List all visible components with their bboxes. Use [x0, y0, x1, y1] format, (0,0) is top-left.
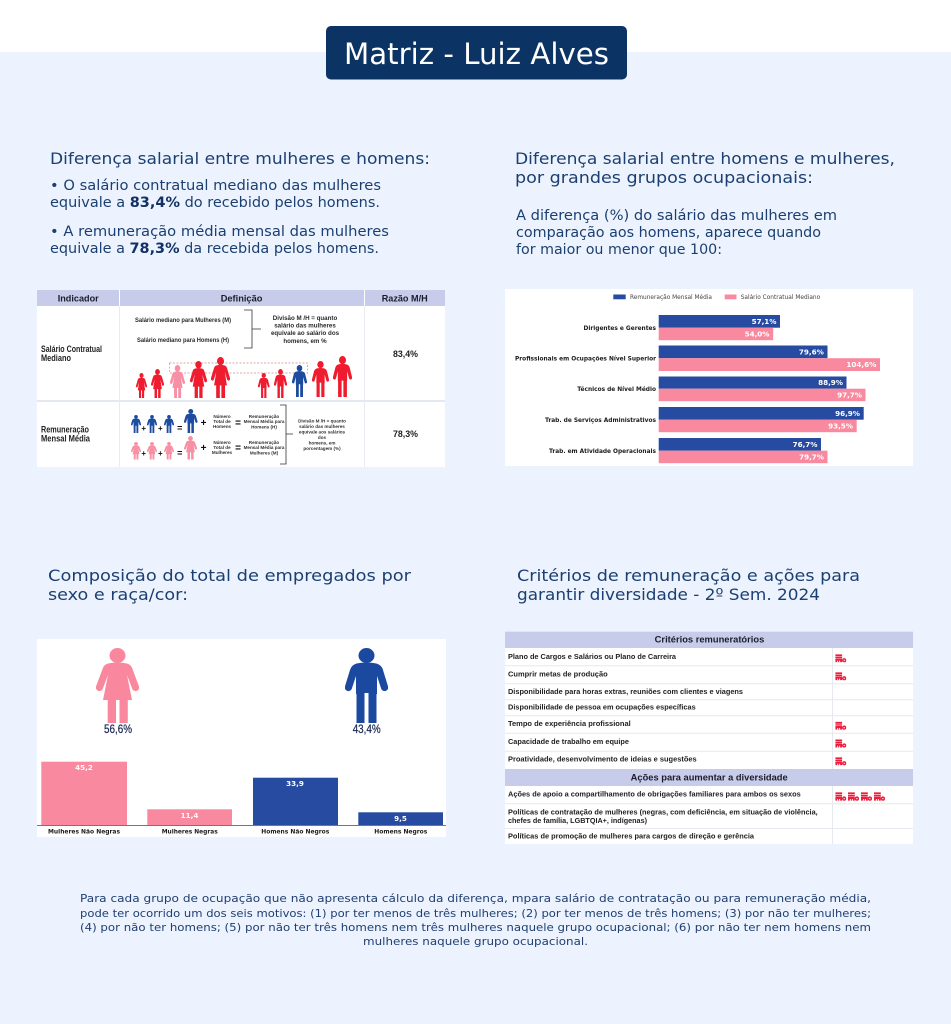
table header — [37, 290, 445, 306]
icons: fórmula homens — [131, 409, 285, 433]
row: trabalho em equipe — [508, 737, 846, 748]
icon: mulher 56,6% — [96, 648, 139, 736]
footer note — [80, 892, 871, 948]
row: atividade operacionais: 76,7% — [793, 440, 818, 449]
icons: fórmula mulheres: Mulheres — [212, 450, 233, 455]
legend — [613, 294, 821, 301]
section header: critérios remuneratórios — [505, 632, 913, 648]
row label: salário contratual mediano — [41, 344, 102, 363]
value 78,3%: 78,3% — [393, 429, 418, 439]
icons: fórmula mulheres: + — [158, 449, 163, 458]
icons: pessoas salário mediano — [136, 356, 352, 398]
definition text: divisão remuneração: dos — [318, 435, 327, 440]
icon: mulher 56,6%: 56,6% — [104, 722, 132, 736]
definition text: divisão remuneração — [280, 405, 346, 464]
heading: grandes grupos ocupacionais: Diferença salarial entre homens e mulheres, — [515, 149, 895, 168]
icons: fórmula homens: + — [141, 424, 146, 433]
section header: critérios remuneratórios: Critérios remuneratórios — [655, 635, 764, 645]
row: políticas de contratação: Políticas de contratação de mulheres (negras, com deficiência, em situação de violência, — [508, 807, 818, 816]
icons: fórmula homens: Remuneração — [249, 414, 279, 419]
row: apoio a obrigações familiares — [508, 790, 884, 801]
icons: fórmula mulheres: Remuneração — [249, 440, 279, 445]
icons: fórmula homens: Número — [213, 414, 231, 419]
section header: ações para diversidade: Ações para aumentar a diversidade — [631, 773, 788, 783]
row: tempo de experiência: Tempo de experiência profissional — [508, 719, 631, 728]
row: políticas de contratação — [508, 807, 818, 825]
definition text: divisão remuneração: Divisão M /H = quanto — [298, 418, 346, 424]
icons: fórmula homens: Mensal Média para — [244, 419, 285, 424]
heading: grandes grupos ocupacionais: por grandes grupos ocupacionais: — [515, 168, 813, 187]
bar: mulheres não negras: Mulheres Não Negras — [48, 828, 120, 836]
row: atividade operacionais — [549, 438, 828, 463]
row: horas extras: Disponibilidade para horas extras, reuniões com clientes e viagens — [508, 687, 743, 696]
definition text: salário mediano: Salário mediano para Homens (H) — [137, 337, 229, 344]
heading: critérios: garantir diversidade - 2º Sem. 2024 — [517, 585, 820, 604]
row: proatividade — [508, 755, 846, 765]
definition text: salário mediano: Divisão M /H = quanto — [273, 315, 337, 322]
row: profissionais nível superior — [515, 346, 880, 371]
row: técnicos de nível médio: 88,9% — [818, 378, 843, 387]
icons: fórmula homens: Total de — [213, 419, 231, 424]
row label: remuneração mensal média: Mensal Média — [41, 434, 90, 444]
bar: mulheres negras — [147, 809, 232, 836]
row: metas de produção — [508, 670, 846, 680]
bar: mulheres negras: 11,4 — [181, 811, 198, 820]
row: políticas de promoção: Políticas de promoção de mulheres para cargos de direção e gerência — [508, 832, 755, 841]
icons: fórmula homens: = — [235, 418, 241, 429]
row: proatividade: Proatividade, desenvolvimento de ideias e sugestões — [508, 755, 697, 764]
footer note: mulheres naquele grupo ocupacional. — [363, 935, 588, 948]
icons: fórmula mulheres: Total de — [213, 445, 231, 450]
value 83,4%: 83,4% — [393, 349, 418, 359]
heading: critérios — [517, 566, 860, 604]
row: dirigentes e gerentes: 57,1% — [752, 317, 776, 326]
bar: mulheres não negras — [41, 762, 127, 836]
row: plano de cargos — [508, 652, 846, 662]
icons: fórmula mulheres — [131, 436, 285, 460]
row: profissionais nível superior: Profissionais em Ocupações Nível Superior — [515, 354, 657, 362]
row: técnicos de nível médio: 97,7% — [837, 391, 862, 400]
row: trabalho em equipe: Capacidade de trabalho em equipe — [508, 737, 629, 746]
text block: salário e remuneração — [50, 178, 389, 257]
section header: ações para diversidade — [505, 769, 913, 786]
text block: explicação da diferença — [516, 208, 837, 258]
definition text: salário mediano — [135, 310, 340, 348]
bar: homens não negros — [253, 778, 338, 836]
title — [326, 26, 627, 80]
icons: fórmula mulheres: + — [141, 449, 146, 458]
row: serviços administrativos — [545, 407, 864, 432]
row: políticas de contratação: chefes de família, LGBTQIA+, indígenas) — [508, 816, 648, 825]
row: plano de cargos: Plano de Cargos e Salários ou Plano de Carreira — [508, 652, 677, 661]
heading: composição — [48, 566, 411, 604]
bar: mulheres não negras: 45,2 — [75, 763, 93, 772]
panel: composição por sexo e raça — [37, 639, 446, 837]
icons: fórmula homens: = — [177, 423, 182, 433]
icons: fórmula mulheres: + — [201, 443, 207, 454]
row label: remuneração mensal média — [41, 424, 90, 444]
row: técnicos de nível médio: Técnicos de Nível Médio — [577, 385, 657, 393]
definition text: salário mediano: salário das mulheres — [274, 322, 336, 330]
row: técnicos de nível médio — [577, 376, 866, 401]
row: serviços administrativos: Trab. de Serviços Administrativos — [545, 416, 656, 424]
text block: salário e remuneração: • O salário contratual mediano das mulheres — [50, 178, 381, 194]
legend: Salário Contratual Mediano — [741, 294, 821, 301]
row: profissionais nível superior: 79,6% — [799, 348, 824, 356]
heading: grandes grupos ocupacionais — [515, 149, 895, 187]
icons: fórmula mulheres: Mulheres (M) — [250, 450, 279, 456]
icons: fórmula mulheres: Número — [213, 440, 231, 445]
definition text: divisão remuneração: homens, em — [309, 440, 335, 446]
table header: Razão M/H — [382, 294, 428, 304]
table header: Definição — [221, 294, 263, 304]
row: dirigentes e gerentes: 54,0% — [745, 330, 770, 338]
panel: tabela critérios e ações — [505, 631, 913, 844]
row: profissionais nível superior: 104,6% — [846, 360, 876, 369]
icons: fórmula homens: Homens — [213, 424, 232, 429]
panel: gráfico de barras por grupo ocupacional — [505, 289, 913, 466]
icon: homem 43,4% — [345, 648, 388, 736]
heading: composição: Composição do total de empregados por — [48, 566, 411, 585]
bar: homens não negros: 33,9 — [286, 779, 304, 788]
bar: mulheres negras: Mulheres Negras — [162, 828, 218, 836]
footer note: Para cada grupo de ocupação que não apresenta cálculo da diferença, mpara salário de contratação ou para remuneração média, — [80, 892, 871, 905]
row: dirigentes e gerentes: Dirigentes e Gerentes — [584, 324, 656, 332]
row: atividade operacionais: 79,7% — [799, 452, 824, 462]
row: serviços administrativos: 96,9% — [835, 409, 860, 418]
text block: explicação da diferença: A diferença (%) do salário das mulheres em — [516, 208, 837, 224]
bar: homens negros — [358, 812, 443, 836]
text block: salário e remuneração: • A remuneração média mensal das mulheres — [50, 224, 389, 240]
heading: composição: sexo e raça/cor: — [48, 585, 188, 604]
text block: salário e remuneração: equivale a 78,3% da recebida pelos homens. — [50, 241, 379, 257]
bar: homens negros: Homens Negros — [374, 828, 427, 836]
definition text: divisão remuneração: equivale aos salários — [299, 430, 346, 434]
text block: explicação da diferença: comparação aos homens, aparece quando — [516, 225, 821, 241]
definition text: salário mediano: Salário mediano para Mulheres (M) — [135, 317, 231, 324]
icons: fórmula homens: + — [158, 424, 163, 433]
table header: Indicador — [58, 294, 99, 304]
legend: Remuneração Mensal Média — [630, 294, 712, 301]
heading: critérios: Critérios de remuneração e ações para — [517, 566, 860, 585]
definition text: salário mediano: equivale ao salário dos — [271, 330, 340, 337]
bar: homens negros: 9,5 — [394, 814, 407, 823]
icons: fórmula homens: Homens (H) — [251, 424, 277, 430]
definition text: salário mediano: homens, em % — [283, 338, 327, 345]
heading: diferença salarial mulheres e homens: Diferença salarial entre mulheres e homens: — [50, 149, 430, 168]
icons: fórmula homens: + — [201, 418, 207, 429]
row: metas de produção: Cumprir metas de produção — [508, 670, 608, 679]
row label: remuneração mensal média: Remuneração — [41, 424, 90, 434]
row: tempo de experiência — [508, 719, 846, 730]
footer note: (4) por não ter homens; (5) por não ter três homens nem três mulheres naquele grupo ocupacional; (6) por não ter nem homens nem — [80, 921, 871, 934]
text block: salário e remuneração: equivale a 83,4% do recebido pelos homens. — [50, 195, 380, 211]
row: ocupações específicas: Disponibilidade de pessoa em ocupações específicas — [508, 703, 696, 712]
row: atividade operacionais: Trab. em Atividade Operacionais — [549, 447, 656, 455]
title: Matriz - Luiz Alves — [344, 37, 609, 71]
footer note: pode ter ocorrido um dos seis motivos: (1) por ter menos de três mulheres; (2) por ter menos de três homens; (3) por não ter mulheres; — [80, 907, 871, 920]
icons: fórmula mulheres: = — [235, 443, 241, 454]
definition text: divisão remuneração: porcentagem (%) — [303, 446, 341, 451]
icons: fórmula mulheres: = — [177, 448, 182, 458]
row: apoio a obrigações familiares: Ações de apoio a compartilhamento de obrigações familiares para ambos os sexos — [508, 790, 801, 799]
icon: homem 43,4%: 43,4% — [353, 722, 381, 736]
row: dirigentes e gerentes — [584, 315, 780, 340]
panel: tabela indicador definição razão — [37, 290, 445, 467]
definition text: divisão remuneração: salário das mulheres — [299, 424, 345, 429]
row label: salário contratual mediano: Mediano — [41, 353, 72, 363]
row label: salário contratual mediano: Salário Contratual — [41, 344, 102, 354]
text block: explicação da diferença: for maior ou menor que 100: — [516, 242, 722, 258]
bar: homens não negros: Homens Não Negros — [261, 828, 329, 836]
icons: fórmula mulheres: Mensal Média para — [244, 445, 285, 450]
row: serviços administrativos: 93,5% — [828, 422, 853, 430]
